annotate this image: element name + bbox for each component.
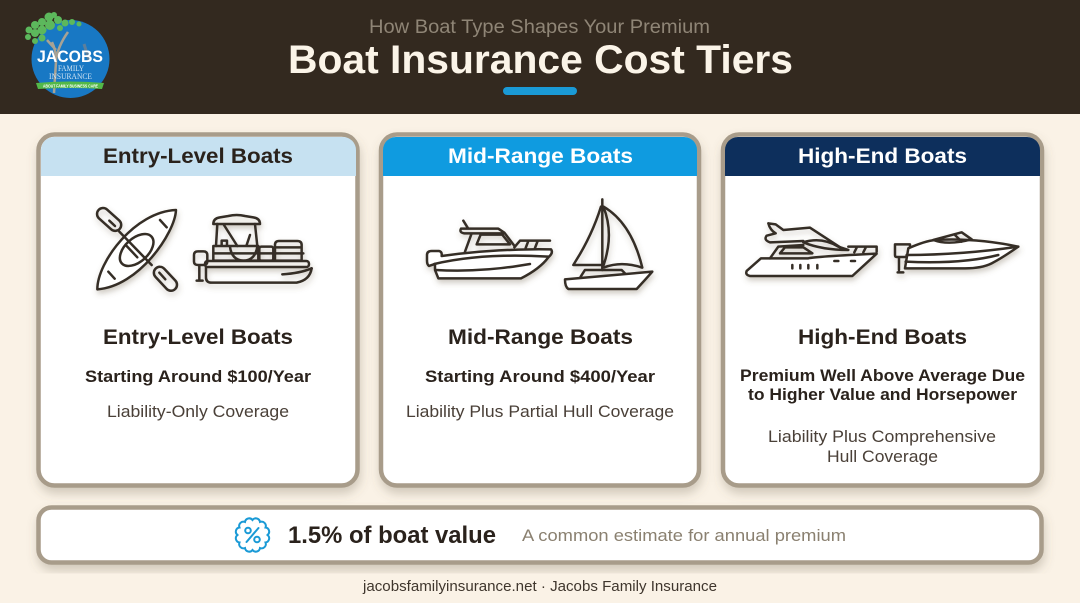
high-end price note [740,366,1025,404]
high-end coverage: Hull Coverage [827,447,938,466]
icon: sailboat [565,199,652,289]
entry-level price: Starting Around $100/Year [85,367,311,386]
mid-range heading: Mid-Range Boats [448,326,633,349]
entry-level header band [41,137,356,176]
icon: kayak [95,206,179,293]
icon: percent badge [236,518,269,552]
header band [0,0,1080,114]
high-end heading: High-End Boats [798,326,967,349]
entry-level coverage: Liability-Only Coverage [107,402,289,421]
panel: entry-level boats [38,134,358,486]
high-end price note: to Higher Value and Horsepower [748,385,1017,404]
panel: high-end boats [723,134,1042,486]
mid-range coverage: Liability Plus Partial Hull Coverage [406,402,674,421]
footer source line: jacobsfamilyinsurance.net · Jacobs Family Insurance [362,579,717,595]
high-end header band [725,137,1040,176]
title accent bar [503,87,577,95]
subtitle: How Boat Type Shapes Your Premium [369,17,710,38]
title: Boat Insurance Cost Tiers [288,38,793,82]
high-end price note: Premium Well Above Average Due [740,366,1025,385]
icon: speedboat [895,232,1018,272]
mid-range header band [383,137,697,176]
callout description: A common estimate for annual premium [522,526,846,545]
logo: Jacobs Family Insurance [25,12,110,98]
logo: Jacobs Family Insurance: INSURANCE [49,72,92,81]
high-end header band: High-End Boats [798,145,967,168]
entry-level heading: Entry-Level Boats [103,326,293,349]
logo: Jacobs Family Insurance: ABOUT FAMILY BUSINESS CARE [43,84,98,88]
icon: pontoon boat [194,215,312,283]
panel: mid-range boats [381,134,699,486]
icon: luxury yacht [746,223,877,276]
callout: rule of thumb [38,508,1042,562]
icon: cabin cruiser [427,221,552,278]
high-end coverage: Liability Plus Comprehensive [768,427,996,446]
logo: Jacobs Family Insurance: JACOBS [37,47,103,66]
logo: Jacobs Family Insurance: FAMILY [58,64,84,73]
callout figure: 1.5% of boat value [288,522,496,549]
high-end coverage [768,427,996,466]
mid-range header band: Mid-Range Boats [448,145,633,168]
entry-level header band: Entry-Level Boats [103,145,293,168]
mid-range price: Starting Around $400/Year [425,367,655,386]
